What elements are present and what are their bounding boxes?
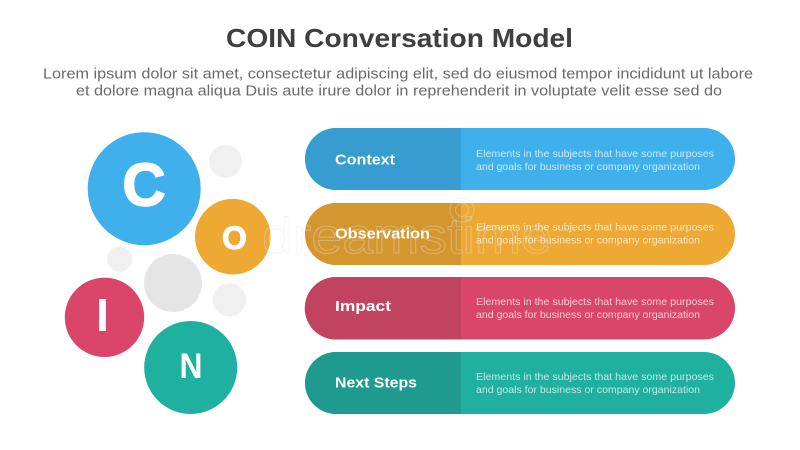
label: Impact: Impact — [335, 298, 391, 315]
decorative gray bubble top — [209, 145, 242, 178]
description: Impact — [476, 296, 714, 321]
description: Observation: and goals for business or company organization — [476, 234, 700, 246]
bubble I: I — [96, 289, 109, 341]
label: Next Steps: Next Steps — [335, 374, 417, 392]
description: Context — [476, 148, 714, 173]
description: Impact: Elements in the subjects that have some purposes — [476, 296, 714, 308]
description: Observation: Elements in the subjects that have some purposes — [476, 222, 714, 234]
bubble N: N — [180, 347, 202, 386]
bubble N — [144, 321, 237, 414]
panel: Next Steps — [305, 352, 735, 414]
subtitle text — [43, 66, 753, 100]
bubble C — [88, 132, 201, 245]
description: Impact: and goals for business or company organization — [476, 309, 700, 321]
panel: Context — [305, 128, 735, 190]
decorative gray bubble large — [144, 254, 202, 312]
watermark: dreamstime — [262, 208, 552, 264]
subtitle text: et dolore magna aliqua Duis aute irure dolor in reprehenderit in voluptate velit esse sed do — [76, 82, 722, 100]
decorative gray bubble right — [213, 283, 246, 316]
bubble O: O — [222, 220, 247, 256]
label: Context: Context — [335, 152, 395, 168]
description: Context: Elements in the subjects that have some purposes — [476, 148, 714, 160]
decorative gray bubble left — [107, 247, 132, 272]
description: Next Steps — [476, 371, 714, 396]
bubble C: C — [122, 152, 166, 218]
description: Observation — [476, 222, 714, 246]
bubble O — [195, 199, 271, 274]
description: Next Steps: Elements in the subjects that have some purposes — [476, 371, 714, 383]
description: Context: and goals for business or company organization — [476, 161, 700, 173]
panel: Impact — [305, 277, 735, 340]
description: Next Steps: and goals for business or company organization — [476, 384, 700, 396]
title: COIN Conversation Model — [226, 23, 573, 53]
label: Observation: Observation — [335, 226, 430, 242]
bubble cluster — [65, 132, 271, 414]
bubble I — [65, 278, 144, 357]
subtitle text: Lorem ipsum dolor sit amet, consectetur adipiscing elit, sed do eiusmod tempor incididunt ut labore — [43, 66, 753, 82]
panel: Observation — [305, 203, 735, 265]
